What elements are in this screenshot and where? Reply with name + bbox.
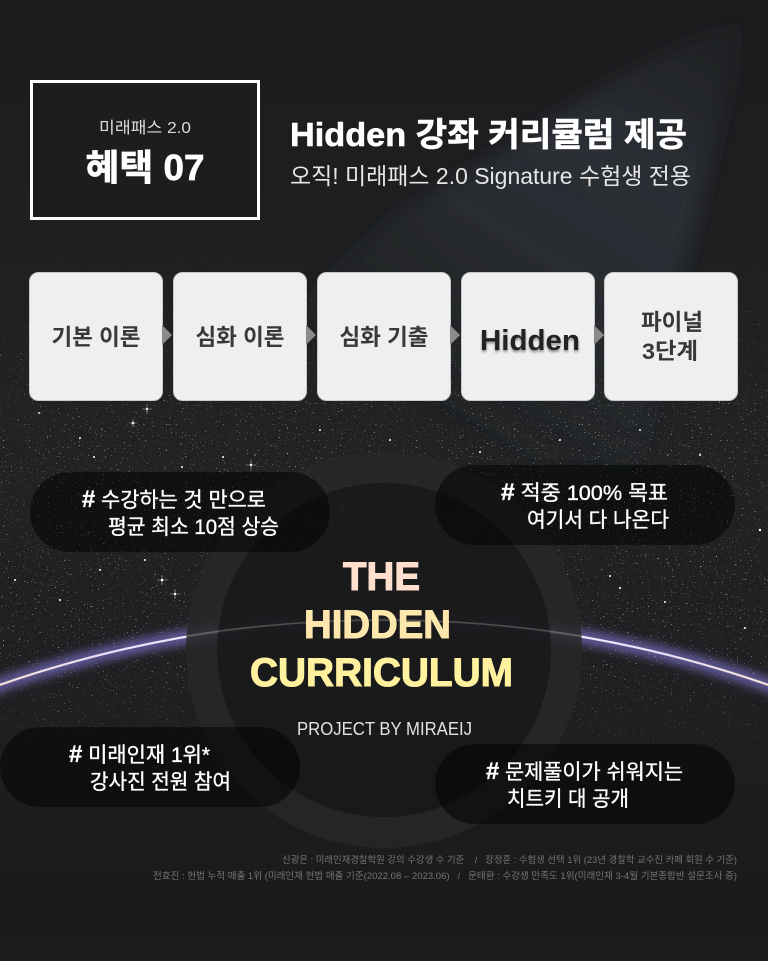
pill: cheat keys: 치트키 대 공개 (507, 788, 629, 811)
step: hidden (462, 272, 594, 400)
pill: 100% hit target (435, 465, 735, 545)
step: final 3 stages: 파이널 (641, 310, 703, 335)
benefit label: 미래패스 2.0 (99, 119, 191, 137)
step: final 3 stages: 3단계 (642, 339, 698, 364)
pill: top instructors: # 미래인재 1위* (69, 741, 210, 768)
planet horizon arc (0, 620, 768, 692)
arrow (450, 325, 460, 345)
step: advanced past exams (318, 272, 450, 400)
footnotes: 전효진 : 헌법 누적 매출 1위 (미래인재 헌법 매출 기준(2022.08 – 2023.06) / 문태환 : 수강생 만족도 1위(미래인재 3-4월 기본종합반 설문조사 중) (153, 870, 737, 882)
pill: 100% hit target: 여기서 다 나온다 (527, 509, 669, 532)
pill: top instructors: 강사진 전원 참여 (90, 771, 231, 794)
pill: average score rise (30, 472, 330, 552)
pill: cheat keys: # 문제풀이가 쉬워지는 (486, 758, 683, 785)
main title (250, 555, 513, 695)
arrow (162, 325, 172, 345)
arrow (306, 325, 316, 345)
light beam (110, 12, 748, 460)
main title: CURRICULUM (250, 651, 513, 695)
arrow (594, 325, 604, 345)
pill: average score rise: # 수강하는 것 만으로 (82, 486, 266, 513)
star field (0, 270, 768, 798)
inner circle (217, 483, 551, 817)
step: advanced theory: 심화 이론 (196, 325, 284, 350)
faint arc through circles (186, 620, 582, 636)
benefit box (32, 82, 258, 218)
subheading: 오직! 미래패스 2.0 Signature 수험생 전용 (290, 163, 691, 189)
main title: THE (343, 555, 420, 599)
pill: average score rise: 평균 최소 10점 상승 (108, 516, 279, 539)
step: advanced theory (174, 272, 306, 400)
step: advanced past exams: 심화 기출 (340, 325, 428, 350)
footnotes: 신광은 : 미래인재경찰학원 강의 수강생 수 기준 / 장정훈 : 수험생 선택 1위 (23년 경찰학 교수진 카페 회원 수 기준) (282, 854, 737, 866)
sparkles (129, 404, 256, 599)
benefit number: 혜택 07 (86, 147, 204, 188)
step: basic theory: 기본 이론 (52, 325, 140, 350)
pill: 100% hit target: # 적중 100% 목표 (501, 479, 668, 506)
project credit: PROJECT BY MIRAEIJ (297, 719, 472, 739)
step: hidden: Hidden (480, 325, 580, 357)
footnotes (153, 854, 737, 882)
pill: cheat keys (435, 744, 735, 824)
curriculum steps (30, 272, 738, 400)
outer circle (186, 452, 582, 848)
step: basic theory (30, 272, 162, 400)
main title: HIDDEN (304, 603, 451, 647)
heading: Hidden 강좌 커리큘럼 제공 (290, 116, 687, 153)
step: final 3 stages (604, 272, 738, 400)
pill: top instructors (0, 727, 300, 807)
